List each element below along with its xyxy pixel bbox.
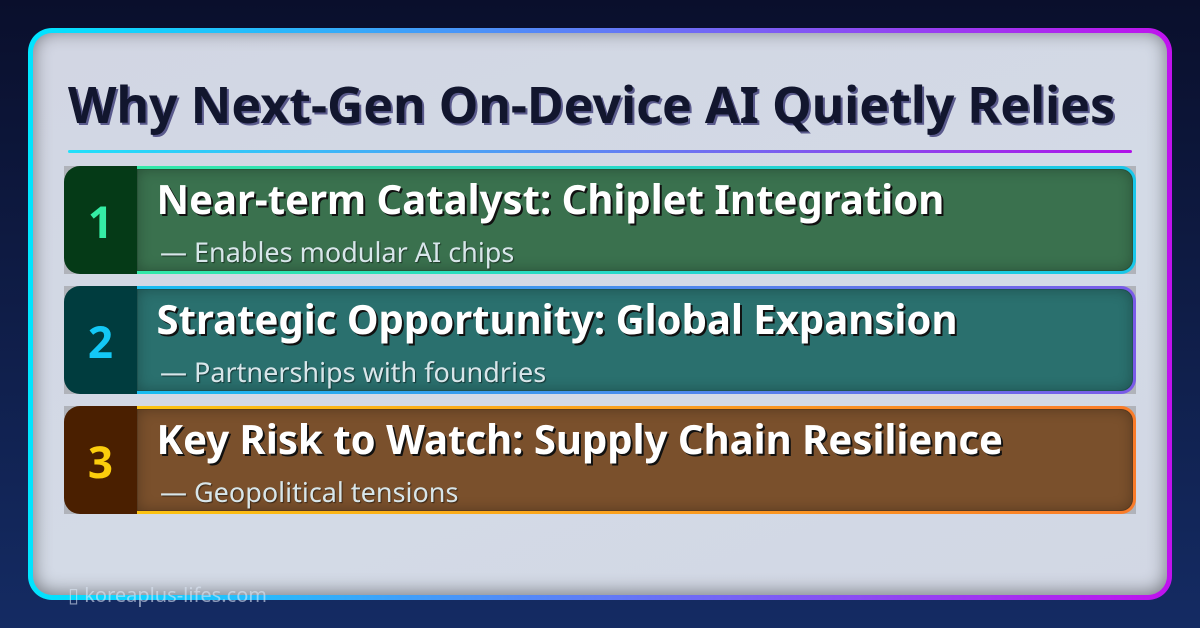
- item 1 heading: Near-term Catalyst: Chiplet Integration: [156, 171, 944, 226]
- item 2 inner shadow: [137, 289, 1133, 391]
- number badge 1: [64, 166, 137, 274]
- item 1 description: — Enables modular AI chips: [160, 233, 514, 270]
- item 1 background: [137, 166, 1136, 274]
- footer watermark: ▯ koreaplus-lifes.com: [68, 581, 267, 608]
- number badge 1: 1: [88, 191, 113, 251]
- panel: item 2: [64, 286, 1136, 394]
- item 3 background: [137, 406, 1136, 514]
- item 3 heading: Key Risk to Watch: Supply Chain Resilience: [156, 411, 1003, 466]
- number badge 2: [64, 286, 137, 394]
- item 2 heading: Strategic Opportunity: Global Expansion: [156, 291, 958, 346]
- number badge 2: 2: [88, 311, 113, 371]
- panel: item 3: [64, 406, 1136, 514]
- item 2 description: — Partnerships with foundries: [160, 353, 546, 390]
- title gradient rule: [68, 150, 1132, 153]
- title: Why Next-Gen On-Device AI Quietly Relies: [68, 69, 1115, 138]
- item 3 inner shadow: [137, 409, 1133, 511]
- item 1 inner shadow: [137, 169, 1133, 271]
- item 3 description: — Geopolitical tensions: [160, 473, 458, 510]
- number badge 3: [64, 406, 137, 514]
- panel: item 1: [64, 166, 1136, 274]
- number badge 3: 3: [88, 431, 113, 491]
- item 2 background: [137, 286, 1136, 394]
